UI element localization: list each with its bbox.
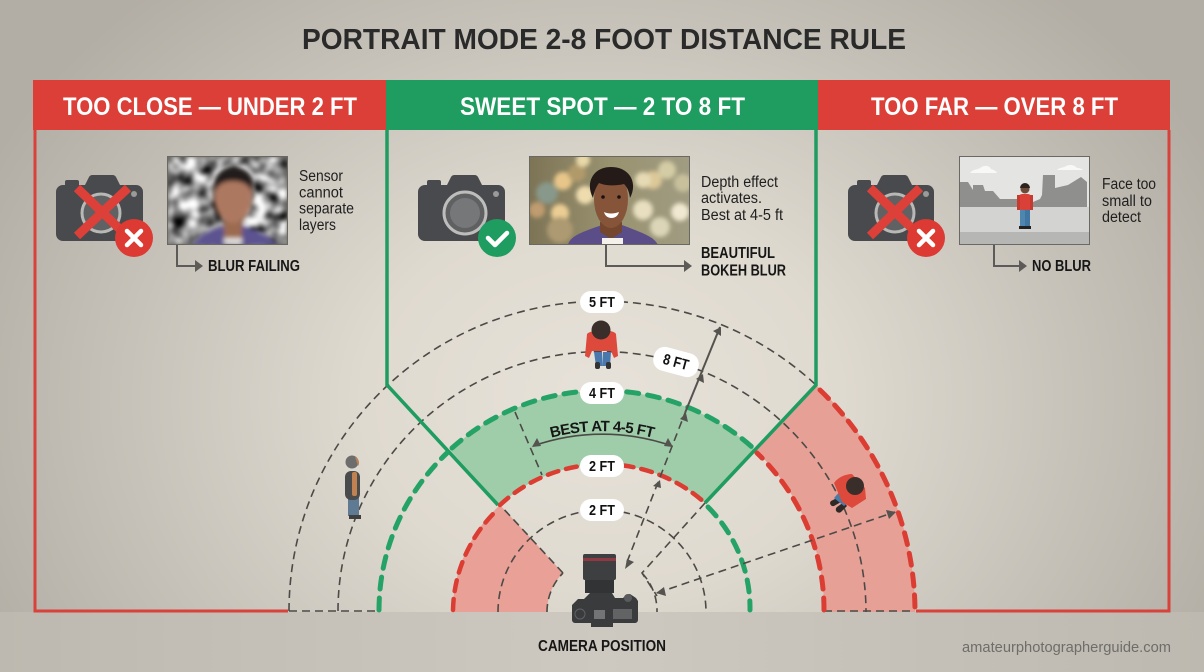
text: face note: Face too	[1102, 176, 1156, 193]
icon: camera with red cross	[848, 175, 945, 257]
icon: camera with check	[418, 175, 516, 257]
text: sensor note	[299, 168, 354, 234]
label: 2 ft upper: 2 FT	[589, 458, 615, 475]
label: beautiful bokeh blur: BEAUTIFUL	[701, 245, 775, 262]
icon: person top view, center	[585, 320, 618, 369]
heading: too close	[33, 80, 386, 130]
heading: sweet spot: SWEET SPOT — 2 TO 8 FT	[460, 93, 745, 121]
photo: blurred portrait failing	[167, 156, 288, 246]
label: 2 ft upper	[580, 455, 624, 477]
label: 8 ft: 8 FT	[661, 351, 691, 374]
text: sensor note: Sensor	[299, 168, 343, 185]
heading: sweet spot	[386, 80, 818, 130]
arrow: best range	[532, 434, 673, 447]
arc: 2 ft red dashed	[453, 464, 705, 610]
text: face note	[1102, 176, 1156, 226]
watermark: amateurphotographerguide.com	[962, 640, 1171, 656]
text: sensor note: layers	[299, 217, 336, 234]
icon: camera with red cross	[56, 175, 153, 257]
panel: too close	[33, 80, 386, 611]
heading: too close: TOO CLOSE — UNDER 2 FT	[63, 93, 357, 121]
label: 8 ft	[651, 344, 701, 380]
label: 5 ft: 5 FT	[589, 294, 615, 311]
arrow: to bokeh blur	[606, 245, 692, 272]
heading: too far: TOO FAR — OVER 8 FT	[871, 93, 1118, 121]
label: 2 ft lower	[580, 499, 624, 521]
icon: person top view, right	[830, 474, 866, 513]
zone: sweet band	[450, 391, 755, 505]
text: sensor note: separate	[299, 200, 354, 218]
arrow: far range	[642, 503, 896, 596]
arc: outer red dashed	[757, 390, 915, 610]
text: depth note	[701, 174, 784, 224]
text: depth note: Depth effect	[701, 174, 779, 191]
label: no blur: NO BLUR	[1032, 258, 1091, 275]
label: 4 ft: 4 FT	[589, 385, 615, 402]
panel: too far	[818, 80, 1170, 611]
text: face note: detect	[1102, 209, 1142, 226]
zone: too close band	[453, 505, 563, 612]
border: sweet spot divider lines	[387, 130, 816, 505]
label: beautiful bokeh blur	[701, 245, 786, 280]
panel: sweet spot	[386, 80, 818, 280]
label: beautiful bokeh blur: BOKEH BLUR	[701, 262, 786, 280]
text: sensor note: cannot	[299, 184, 344, 202]
label: 2 ft lower: 2 FT	[589, 502, 615, 519]
heading: too far	[818, 80, 1170, 130]
arc: 4 ft green dashed	[379, 391, 752, 610]
label: camera position: CAMERA POSITION	[538, 638, 666, 655]
label: 4 ft	[580, 382, 624, 404]
arrow: to blur failing	[177, 245, 203, 272]
chart: distance zones fan	[288, 130, 918, 627]
arrow: to no blur	[994, 245, 1027, 272]
photo: distant small subject	[958, 156, 1090, 245]
icon: person side view, left	[345, 456, 361, 519]
text: depth note: Best at 4-5 ft	[701, 207, 784, 224]
zone: too far band	[755, 385, 915, 612]
label: 5 ft	[580, 291, 624, 313]
text: depth note: activates.	[701, 190, 762, 207]
photo: portrait with bokeh	[529, 153, 692, 245]
text: face note: small to	[1102, 193, 1152, 210]
label: best at 4-5 ft: BEST AT 4-5 FT	[550, 420, 656, 438]
icon: camera at position	[572, 554, 638, 627]
title: PORTRAIT MODE 2-8 FOOT DISTANCE RULE	[302, 24, 906, 56]
arrow: 8 ft range	[625, 327, 721, 569]
label: blur failing: BLUR FAILING	[208, 258, 300, 275]
